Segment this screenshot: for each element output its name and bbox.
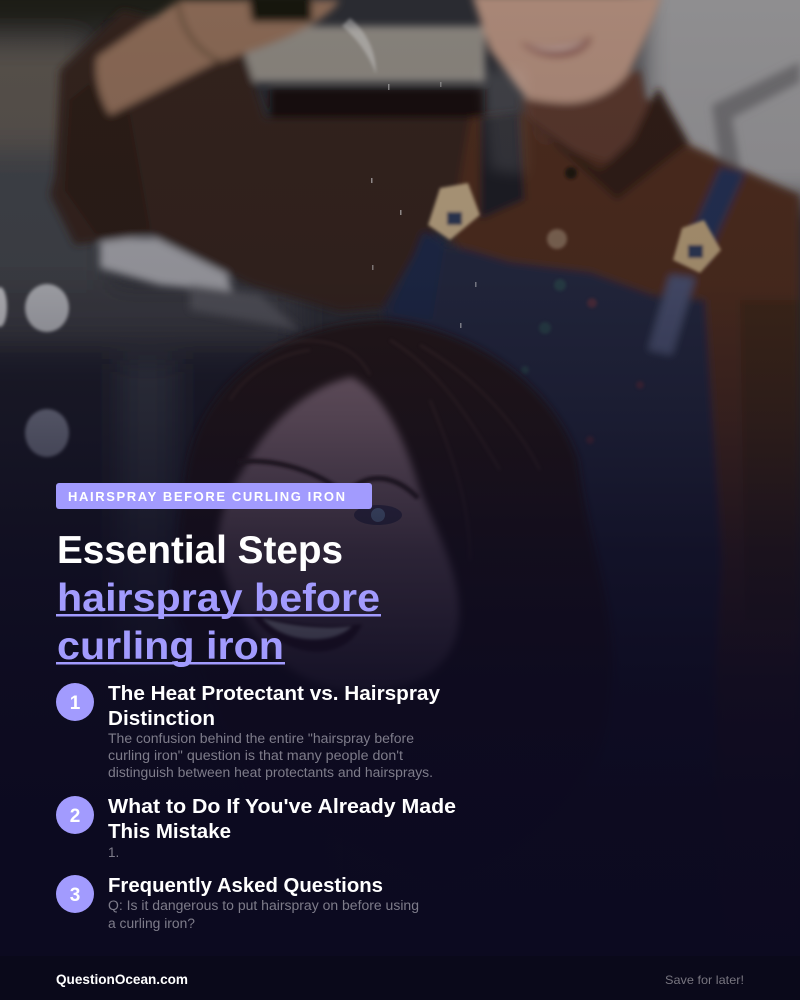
step 1 number badge xyxy=(56,683,94,721)
step 2 description: 1. xyxy=(108,845,119,860)
step 2 heading xyxy=(108,796,456,843)
footer save note: Save for later! xyxy=(665,973,744,987)
step 3 description: a curling iron? xyxy=(108,916,195,931)
title xyxy=(56,529,381,668)
step 2 xyxy=(56,796,456,860)
title: curling iron xyxy=(57,625,284,668)
stylist face xyxy=(472,0,662,103)
step 1 heading xyxy=(108,683,441,730)
apron paint flecks xyxy=(521,279,644,444)
step 1 description xyxy=(108,731,433,780)
step 2 number badge xyxy=(56,796,94,834)
apron xyxy=(383,240,722,780)
step 3 number badge xyxy=(56,875,94,913)
step 1 heading: The Heat Protectant vs. Hairspray xyxy=(108,683,441,705)
stylist neck and collar xyxy=(520,70,650,165)
step 3 description: Q: Is it dangerous to put hairspray on before using xyxy=(108,898,419,913)
shirt sleeve and body xyxy=(50,10,490,312)
step 3 xyxy=(56,875,419,931)
title: hairspray before xyxy=(57,577,380,620)
spray mist xyxy=(342,18,525,328)
category badge: HAIRSPRAY BEFORE CURLING IRON xyxy=(68,489,345,504)
step 1 xyxy=(56,683,441,780)
stylist arm xyxy=(96,0,340,115)
step 1 heading: Distinction xyxy=(108,708,215,730)
step 1 description: The confusion behind the entire "hairspray before xyxy=(108,731,414,746)
step 3 description xyxy=(108,898,419,931)
category badge xyxy=(56,483,372,509)
step 3 number badge: 3 xyxy=(70,885,80,906)
step 1 description: distinguish between heat protectants and hairsprays. xyxy=(108,765,433,780)
footer band xyxy=(0,956,800,1000)
title: Essential Steps xyxy=(57,529,343,572)
step 1 description: curling iron" question is that many people don't xyxy=(108,748,403,763)
seated woman xyxy=(170,320,613,880)
step 3 heading: Frequently Asked Questions xyxy=(108,875,383,897)
step 1 number badge: 1 xyxy=(70,693,81,714)
footer brand: QuestionOcean.com xyxy=(56,971,188,987)
step 2 heading: This Mistake xyxy=(108,821,231,843)
lights and buckles xyxy=(0,167,721,457)
step 2 number badge: 2 xyxy=(70,806,80,827)
step 2 heading: What to Do If You've Already Made xyxy=(108,796,456,818)
